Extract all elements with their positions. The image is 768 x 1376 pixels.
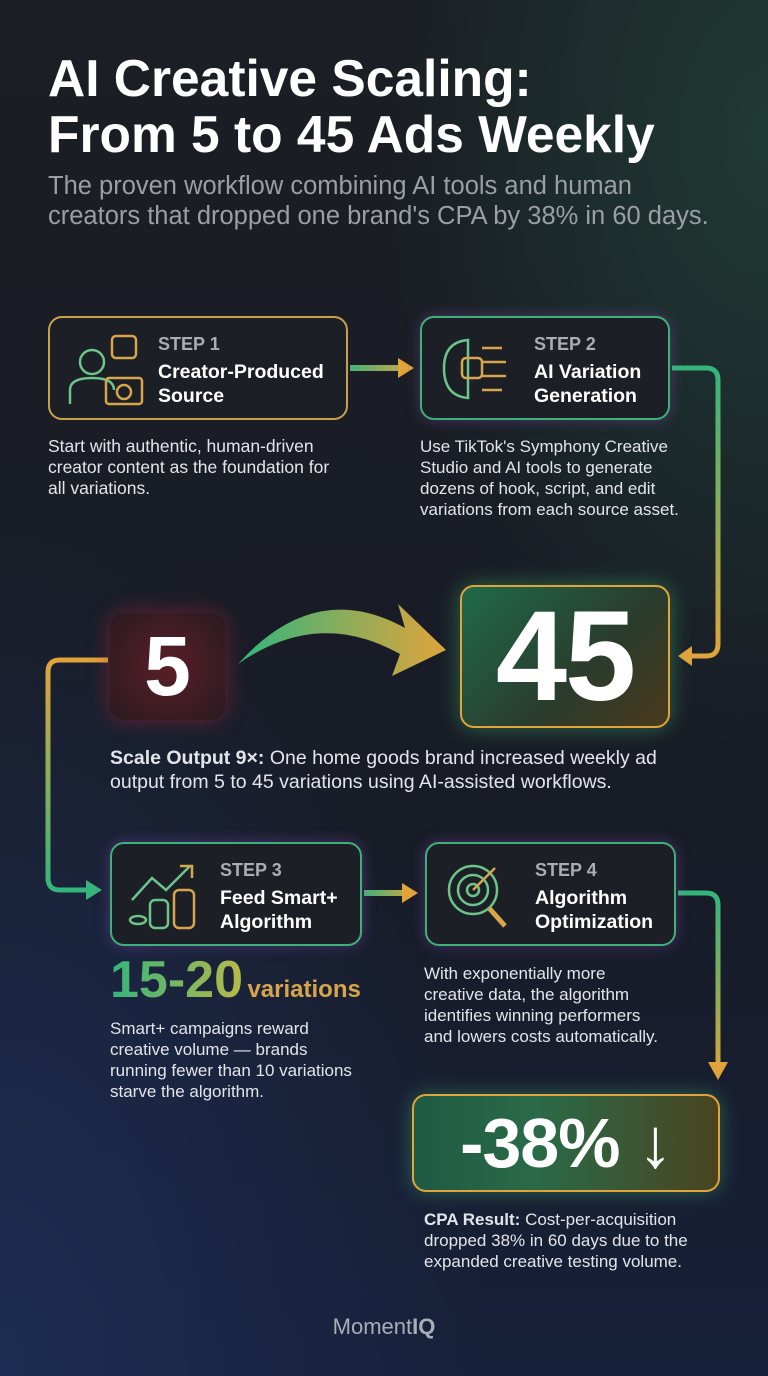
stat: 5	[110, 613, 225, 720]
panel: step 4: Algorithm	[535, 887, 627, 909]
text: step 3: Smart+ campaigns reward	[110, 1019, 309, 1038]
stat: 45	[460, 585, 670, 728]
stat: -38%: -38% ↓	[460, 1104, 672, 1182]
icon: creator	[68, 334, 144, 406]
stat: 5: 5	[144, 619, 191, 713]
text: scale output: output from 5 to 45 variations using AI-assisted workflows.	[110, 771, 612, 793]
panel: step 3: Algorithm	[220, 911, 312, 933]
stat: 15-20 variations: 15-20 variations	[110, 951, 361, 1009]
text: step 1	[48, 436, 329, 498]
panel: step 4: Optimization	[535, 911, 653, 933]
panel: step 2	[420, 316, 670, 420]
panel: step 1: Creator-Produced	[158, 361, 324, 383]
text: step 4: and lowers costs automatically.	[424, 1027, 658, 1046]
text: step 4: With exponentially more	[424, 964, 605, 983]
text: step 2: variations from each source asset.	[420, 500, 679, 519]
subtitle: creators that dropped one brand's CPA by 38% in 60 days.	[48, 202, 709, 230]
stat: -38%	[412, 1094, 720, 1192]
text: step 2: dozens of hook, script, and edit	[420, 479, 655, 498]
text: step 4: creative data, the algorithm	[424, 985, 629, 1004]
text: step 2: Use TikTok's Symphony Creative	[420, 437, 668, 456]
title: From 5 to 45 Ads Weekly	[48, 105, 655, 163]
text: step 3: creative volume — brands	[110, 1040, 307, 1059]
text: scale output	[110, 747, 657, 793]
panel: step 1: STEP 1	[158, 334, 220, 354]
panel: step 3: STEP 3	[220, 860, 282, 880]
panel: step 4	[425, 842, 676, 946]
text: step 4	[424, 964, 658, 1046]
text: CPA result: dropped 38% in 60 days due to the	[424, 1231, 688, 1250]
panel: step 2: STEP 2	[534, 334, 596, 354]
panel: step 2: AI Variation	[534, 361, 641, 383]
panel: step 3: Feed Smart+	[220, 887, 338, 909]
text: step 3: running fewer than 10 variations	[110, 1061, 352, 1080]
text: CPA result: CPA Result: Cost-per-acquisition	[424, 1210, 676, 1229]
panel: step 3	[110, 842, 362, 946]
title: AI Creative Scaling:	[48, 49, 532, 107]
text: scale output: Scale Output 9×: One home goods brand increased weekly ad	[110, 747, 657, 769]
text: CPA result	[424, 1210, 688, 1271]
panel: step 1	[48, 316, 348, 420]
icon: growth coins	[128, 864, 196, 930]
stat: 45: 45	[496, 585, 634, 728]
text: step 3: starve the algorithm.	[110, 1082, 264, 1101]
title	[48, 49, 655, 163]
icon: target	[448, 864, 507, 928]
subtitle	[48, 172, 709, 230]
panel: step 4: STEP 4	[535, 860, 597, 880]
text: step 2: Studio and AI tools to generate	[420, 458, 653, 477]
icon: brain	[442, 338, 506, 400]
text: step 2	[420, 437, 679, 519]
text: step 1: Start with authentic, human-driven	[48, 436, 314, 456]
panel: step 1: Source	[158, 385, 224, 407]
text: step 1: creator content as the foundation for	[48, 457, 329, 477]
panel: step 2: Generation	[534, 385, 637, 407]
logo: MomentIQ	[333, 1314, 435, 1339]
text: CPA result: expanded creative testing volume.	[424, 1252, 682, 1271]
text: step 1: all variations.	[48, 478, 150, 498]
subtitle: The proven workflow combining AI tools and human	[48, 172, 632, 200]
text: step 4: identifies winning performers	[424, 1006, 640, 1025]
text: step 3	[110, 1019, 352, 1101]
